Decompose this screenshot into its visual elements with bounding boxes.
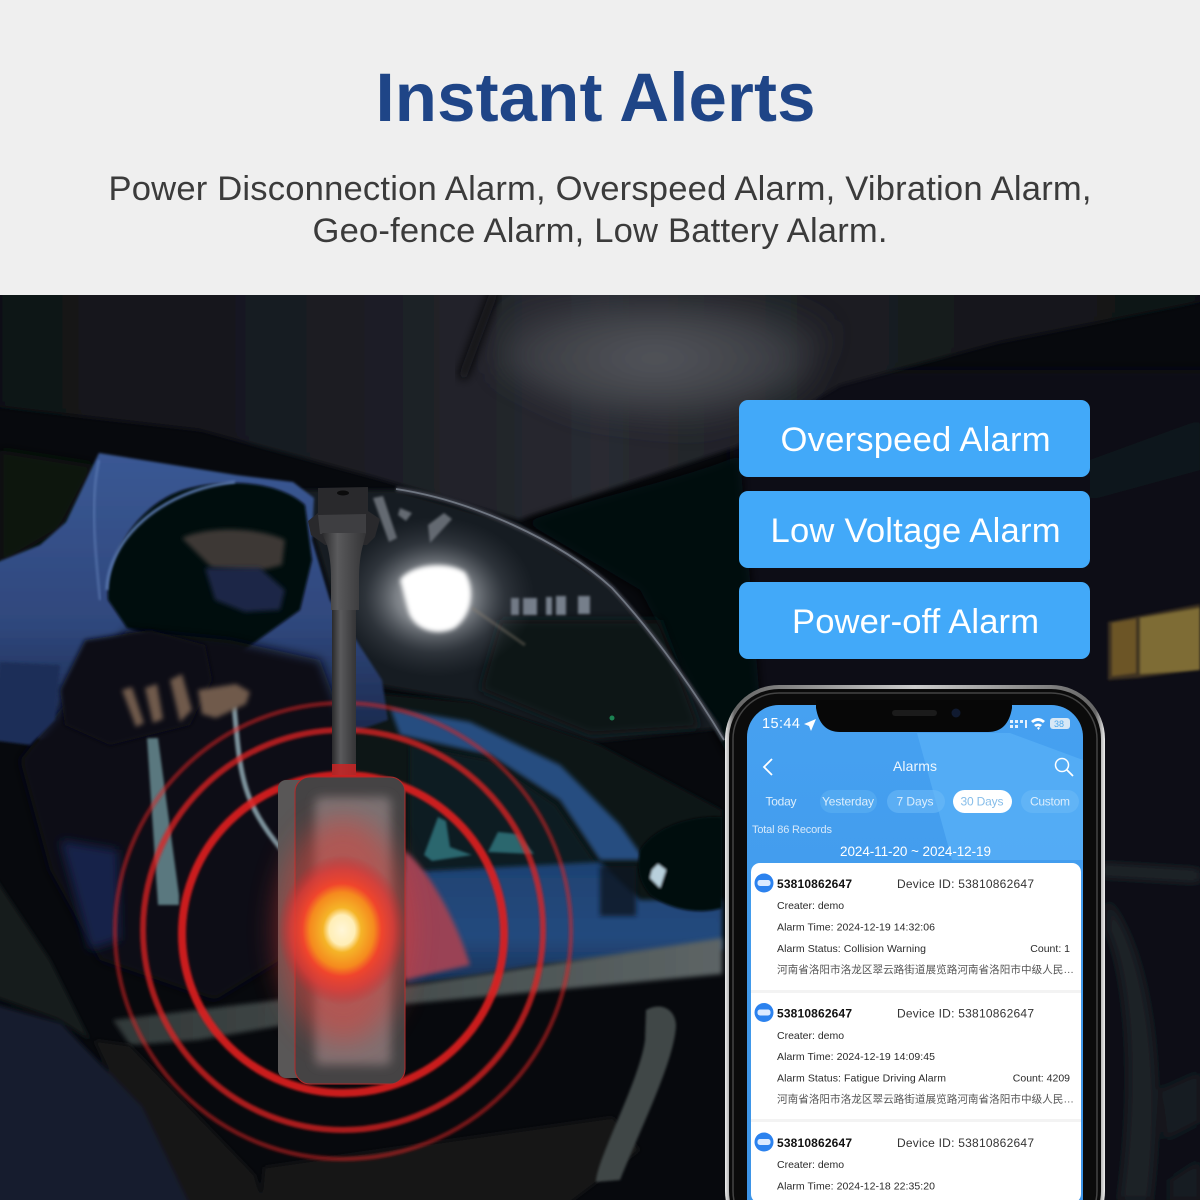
record 1: Device ID: 53810862647 <box>897 877 1034 891</box>
cable <box>332 610 356 775</box>
filter tabs: 7 Days <box>896 794 934 808</box>
record 2: Alarm Time: 2024-12-19 14:09:45 <box>777 1051 935 1063</box>
app header: Alarms <box>893 758 937 774</box>
phone screen <box>747 705 1083 1200</box>
badge: low voltage alarm <box>739 491 1090 568</box>
alarm badges <box>739 400 1090 659</box>
phone frame <box>725 685 1105 1200</box>
record 1: Count: 1 <box>1030 943 1070 955</box>
subtitle <box>108 170 1092 250</box>
header background <box>0 0 1200 295</box>
window frame highlights <box>396 489 724 740</box>
record 1: Alarm Status: Collision Warning <box>777 943 926 955</box>
badge: low voltage alarm: Low Voltage Alarm <box>770 512 1060 550</box>
record 1 <box>754 874 1074 976</box>
record 2: Count: 4209 <box>1013 1072 1070 1084</box>
badge: overspeed alarm: Overspeed Alarm <box>780 421 1050 459</box>
gloved hand <box>60 630 250 745</box>
record 2 <box>754 1003 1074 1106</box>
status bar: 38 <box>1054 719 1064 729</box>
record 1: 河南省洛阳市洛龙区翠云路街道展览路河南省洛阳市中级人民… <box>777 963 1074 976</box>
cable red glow <box>332 764 356 776</box>
badge: power-off alarm <box>739 582 1090 659</box>
record 3: 53810862647 <box>777 1136 852 1150</box>
photo: thief at car window at night <box>0 285 1200 1200</box>
record 2: Creater: demo <box>777 1030 844 1042</box>
badge: overspeed alarm <box>739 400 1090 477</box>
record 2: Alarm Status: Fatigue Driving Alarm <box>777 1072 946 1084</box>
record 2: Device ID: 53810862647 <box>897 1006 1034 1020</box>
record 3: Creater: demo <box>777 1159 844 1171</box>
seat, belt and interior <box>0 870 640 1200</box>
headlight glare <box>356 528 526 667</box>
door sill band <box>113 938 722 1045</box>
device body <box>278 777 405 1084</box>
outside seen through window <box>300 490 722 742</box>
record 3: Device ID: 53810862647 <box>897 1136 1034 1150</box>
status bar <box>762 716 1070 732</box>
side mirror <box>638 817 722 911</box>
hooded thief <box>0 453 388 1000</box>
record 1: Creater: demo <box>777 900 844 912</box>
filter tabs: Today <box>766 794 796 808</box>
record 2: 53810862647 <box>777 1006 852 1020</box>
app header <box>764 758 1073 776</box>
device red tint <box>277 818 409 1042</box>
subtitle: Geo-fence Alarm, Low Battery Alarm. <box>312 212 888 250</box>
foliage behind thief <box>4 454 88 557</box>
filter tabs <box>766 790 1079 813</box>
orange building window <box>1108 604 1200 680</box>
record 2: 河南省洛阳市洛龙区翠云路街道展览路河南省洛阳市中级人民… <box>777 1092 1074 1106</box>
record 1: 53810862647 <box>777 877 852 891</box>
screen highlight <box>917 733 1083 860</box>
door handle <box>596 1006 676 1182</box>
subtitle: Power Disconnection Alarm, Overspeed Alarm, Vibration Alarm, <box>108 170 1092 208</box>
title: Instant Alerts <box>376 59 816 136</box>
record 1: Alarm Time: 2024-12-19 14:32:06 <box>777 922 935 934</box>
car ceiling <box>0 285 1200 520</box>
filter tabs: Yesterday <box>822 794 874 808</box>
alarm records list <box>751 863 1081 1200</box>
filter tabs: 30 Days <box>960 794 1004 808</box>
filter tabs: Custom <box>1030 794 1070 808</box>
dark pillar <box>726 456 760 716</box>
status bar: 15:44 <box>762 716 800 732</box>
alarm rings <box>115 703 571 1159</box>
record summary: Total 86 Records <box>752 824 832 836</box>
red LED glow <box>278 855 406 1005</box>
smartphone <box>725 685 1105 1200</box>
record 3: Alarm Time: 2024-12-18 22:35:20 <box>777 1180 935 1192</box>
record 3 <box>754 1132 1034 1192</box>
notch <box>816 700 1012 732</box>
right side interior <box>730 370 1200 1200</box>
date range: 2024-11-20 ~ 2024-12-19 <box>840 844 991 859</box>
tracker device <box>277 487 409 1084</box>
blue car outside <box>356 696 725 986</box>
badge: power-off alarm: Power-off Alarm <box>792 603 1039 641</box>
connector <box>308 487 380 610</box>
